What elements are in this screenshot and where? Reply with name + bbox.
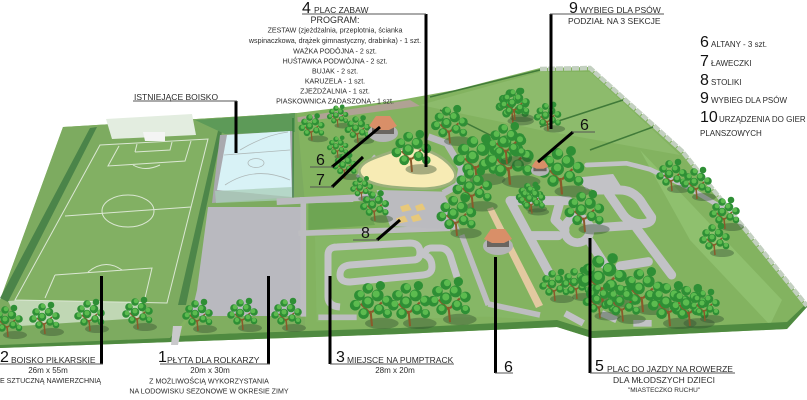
label: plac do jazdy na rowerze: DLA MŁODSZYCH DZIECI bbox=[613, 375, 715, 385]
label: plac do jazdy na rowerze: PLAC DO JAZDY NA ROWERZE bbox=[607, 364, 733, 374]
legend: ALTANY - 3 szt. bbox=[711, 40, 767, 49]
label: plyta dla rolkarzy: NA LODOWISKU SEZONOWE W OKRESIE ZIMY bbox=[129, 388, 289, 396]
label: plyta dla rolkarzy: PŁYTA DLA ROLKARZY bbox=[167, 355, 260, 365]
legend: WYBIEG DLA PSÓW bbox=[711, 96, 787, 105]
heading: wybieg dla psow: 9 bbox=[569, 0, 578, 17]
cycling town road bbox=[510, 163, 722, 323]
roller plate bbox=[171, 207, 305, 345]
heading: plac zabaw program: ZJEŻDŻALNIA - 1 szt. bbox=[300, 86, 370, 96]
heading: plac zabaw program: wspinaczkowa, drążek gimnastyczny, drabinka) - 1 szt. bbox=[248, 37, 421, 45]
label: plac do jazdy na rowerze: 5 bbox=[595, 358, 604, 375]
legend: 8 bbox=[700, 72, 709, 89]
heading: istniejace boisko: ISTNIEJĄCE BOISKO bbox=[134, 92, 218, 102]
label: plac do jazdy na rowerze: "MIASTECZKO RUCHU" bbox=[628, 387, 701, 394]
icon: gazebo left bbox=[368, 116, 398, 142]
label: pumptrack bbox=[336, 349, 454, 375]
football field bbox=[15, 139, 208, 303]
marker labels: 6 bbox=[580, 117, 589, 134]
heading: plac zabaw program: 4 bbox=[302, 0, 311, 17]
heading: plac zabaw program: KARUZELA - 1 szt. bbox=[305, 78, 365, 86]
marker labels: 6 bbox=[316, 152, 325, 169]
pitch enclosure bbox=[0, 113, 305, 345]
label: plyta dla rolkarzy: 20m x 30m bbox=[190, 366, 230, 375]
sand playground bbox=[359, 148, 455, 189]
label: boisko pilkarskie: 2 bbox=[0, 349, 9, 366]
legend: 6 bbox=[700, 34, 709, 51]
legend: URZĄDZENIA DO GIER bbox=[719, 115, 806, 124]
label: plyta dla rolkarzy: Z MOŻLIWOŚCIĄ WYKORZYSTANIA bbox=[149, 376, 269, 386]
legend: 10 bbox=[700, 109, 718, 126]
label: boisko pilkarskie: 26m x 55m bbox=[28, 366, 68, 375]
legend bbox=[700, 34, 806, 138]
heading: plac zabaw program bbox=[248, 0, 421, 106]
marker labels: 7 bbox=[316, 172, 325, 189]
legend: ŁAWECZKI bbox=[711, 59, 752, 68]
marker labels bbox=[316, 117, 589, 376]
heading: plac zabaw program: ZESTAW (zjeżdżalnia, przeplotnia, ścianka bbox=[268, 26, 402, 34]
legend: PLANSZOWYCH bbox=[700, 129, 762, 138]
icon: gazebo upper right bbox=[531, 160, 549, 176]
icon: gazebo lower bbox=[483, 229, 513, 255]
heading: wybieg dla psow bbox=[568, 0, 661, 26]
legend: 9 bbox=[700, 90, 709, 107]
sand track bbox=[487, 207, 543, 308]
label: pumptrack: 28m x 20m bbox=[375, 366, 415, 375]
label: boisko pilkarskie: E SZTUCZNĄ NAWIERZCHNIĄ bbox=[0, 377, 101, 385]
label: boisko pilkarskie bbox=[0, 349, 101, 385]
label: plyta dla rolkarzy bbox=[129, 349, 289, 396]
site ground bbox=[0, 67, 807, 348]
park paths and lawns bbox=[298, 200, 540, 322]
heading: plac zabaw program: WAŻKA PODÓJNA - 2 szt. bbox=[293, 46, 377, 56]
label: plac do jazdy na rowerze bbox=[595, 358, 733, 394]
legend: 7 bbox=[700, 53, 709, 70]
label: pumptrack: 3 bbox=[336, 349, 345, 366]
heading: plac zabaw program: PROGRAM: bbox=[310, 15, 360, 25]
heading: plac zabaw program: HUŚTAWKA PODWÓJNA - 2 szt. bbox=[283, 56, 387, 66]
heading: wybieg dla psow: WYBIEG DLA PSÓW bbox=[580, 5, 661, 15]
site plan drawing bbox=[0, 67, 807, 348]
marker labels: 6 bbox=[504, 359, 513, 376]
label: pumptrack: MIEJSCE NA PUMPTRACK bbox=[347, 355, 454, 365]
heading: plac zabaw program: PLAC ZABAW bbox=[314, 5, 368, 15]
heading: plac zabaw program: BUJAK - 2 szt. bbox=[312, 68, 358, 76]
marker labels: 8 bbox=[361, 225, 370, 242]
heading: plac zabaw program: PIASKOWNICA ZADASZONA - 1 szt. bbox=[276, 98, 394, 106]
pumptrack bbox=[328, 243, 457, 307]
plaza and road around the playground bbox=[277, 137, 462, 230]
basketball court bbox=[212, 118, 294, 203]
heading: wybieg dla psow: PODZIAŁ NA 3 SEKCJE bbox=[568, 16, 661, 26]
label: plyta dla rolkarzy: 1 bbox=[158, 349, 167, 366]
label: boisko pilkarskie: BOISKO PIŁKARSKIE bbox=[11, 355, 96, 365]
trees bbox=[0, 88, 744, 339]
legend: STOLIKI bbox=[711, 78, 742, 87]
